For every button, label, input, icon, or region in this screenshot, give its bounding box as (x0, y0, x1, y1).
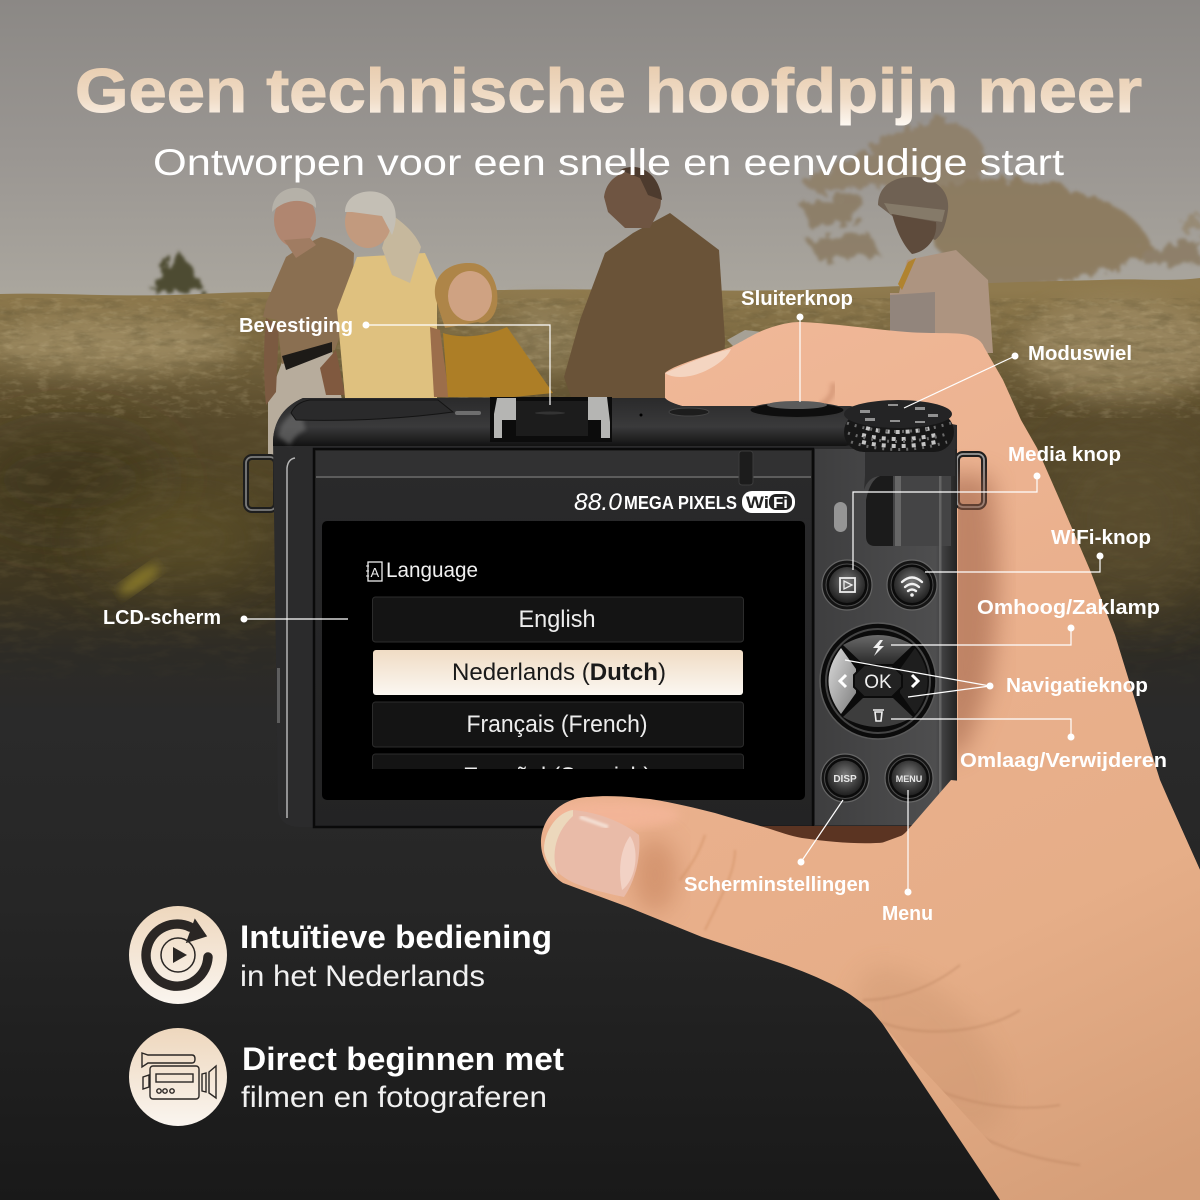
photo: small tree on the left (153, 250, 202, 292)
icon: video camera (129, 1028, 227, 1126)
up segment (843, 635, 913, 664)
camera (246, 397, 984, 827)
top pinhole (640, 414, 642, 416)
side strip (939, 476, 942, 821)
speaker slot (455, 411, 481, 415)
shadow gap under camera (750, 826, 915, 845)
camera body (273, 398, 957, 827)
skin shading (540, 801, 1080, 1165)
callout: WiFi-knop: WiFi-knop (1051, 527, 1151, 549)
option English (372, 597, 744, 642)
photo: family walking (263, 167, 993, 455)
fingernail (665, 349, 731, 377)
option Francais: Français (French) (466, 711, 648, 738)
father (564, 167, 725, 400)
navigation wheel: OK (864, 672, 892, 693)
LCD screen (322, 521, 805, 800)
mother (878, 177, 993, 353)
media button (822, 560, 872, 610)
hot shoe (490, 397, 612, 442)
panel hinge highlight (316, 476, 811, 478)
language heading: A (370, 565, 380, 580)
side port (277, 668, 280, 723)
language heading: Language (386, 559, 478, 582)
finger knuckle crease (820, 383, 833, 406)
OK button (854, 665, 902, 697)
megapixel badge: 88.0 (574, 489, 623, 516)
thumb grip (866, 476, 951, 546)
hand: palm and index finger behind camera (665, 322, 1200, 1200)
DISP button (821, 754, 869, 802)
option Nederlands selected (373, 650, 743, 695)
top left corner highlight (278, 410, 306, 445)
flash icon (873, 640, 884, 656)
option Nederlands selected: Nederlands (Dutch) (452, 659, 666, 686)
callout: Menu: Menu (882, 903, 933, 925)
option Francais (372, 702, 744, 747)
callout: Bevestiging (239, 315, 550, 405)
top plate (273, 398, 850, 446)
megapixel badge: MEGA PIXELS (624, 493, 737, 513)
right segment (900, 648, 928, 714)
navigation wheel (820, 623, 936, 739)
strap lug right (957, 454, 984, 507)
shutter button (750, 401, 844, 418)
strap lug left (246, 457, 276, 510)
callout: Sluiterknop (741, 288, 853, 402)
wifi button (887, 560, 937, 610)
callout: Moduswiel: Moduswiel (1028, 343, 1132, 365)
megapixel badge: Wi (746, 493, 769, 512)
panel tab (739, 451, 753, 485)
callout: Omlaag/Verwijderen (891, 719, 1167, 772)
megapixel badge: Fi (773, 495, 788, 512)
feature heading: Direct beginnen met (242, 1041, 564, 1077)
option English: English (518, 606, 596, 633)
megapixel badge (574, 489, 795, 516)
option Espanol clipped (372, 754, 744, 769)
palm shadow beside camera (940, 475, 998, 760)
thumb and lower palm in front of camera (540, 780, 1200, 1200)
callout: LCD-scherm: LCD-scherm (103, 607, 221, 629)
icon: replay circle (129, 906, 227, 1004)
subtitle: Ontworpen voor een snelle en eenvoudige start (153, 142, 1065, 183)
panel upper band (316, 451, 811, 477)
flip screen panel (314, 449, 813, 827)
callout: Omlaag/Verwijderen: Omlaag/Verwijderen (960, 750, 1167, 772)
DISP button: DISP (833, 774, 857, 785)
title: Geen technische hoofdpijn meer (75, 57, 1142, 126)
mode dial (844, 400, 954, 452)
trash icon (873, 710, 884, 721)
grandfather (263, 188, 354, 455)
callout: LCD-scherm (103, 607, 348, 629)
MENU button (885, 754, 933, 802)
callout: Media knop: Media knop (1008, 444, 1121, 466)
callout: Menu (882, 790, 933, 925)
callout: Bevestiging: Bevestiging (239, 315, 353, 337)
callout: Omhoog/Zaklamp (891, 597, 1160, 645)
callout: Scherminstellingen: Scherminstellingen (684, 874, 870, 896)
callout: Omhoog/Zaklamp: Omhoog/Zaklamp (977, 597, 1160, 619)
photo: field fading into dark lower area (0, 278, 1200, 1200)
grandmother (337, 191, 437, 398)
feature: intuitive operation (129, 906, 552, 1004)
thumbnail (544, 810, 639, 897)
down segment (843, 698, 913, 727)
callout: Scherminstellingen (684, 800, 870, 896)
indicator LED (834, 502, 847, 532)
shoulder under dial (815, 430, 955, 490)
feature: start filming directly (129, 1028, 564, 1126)
photo: tree on the right (800, 120, 1200, 295)
grey sleeve behind finger (727, 330, 762, 348)
callout: WiFi-knop (925, 527, 1151, 572)
top small button (669, 408, 709, 416)
callout: Moduswiel (904, 343, 1132, 408)
right control panel (815, 449, 957, 825)
MENU button: MENU (896, 774, 922, 784)
callout: Sluiterknop: Sluiterknop (741, 288, 853, 310)
left arrow (840, 675, 846, 687)
callout: Navigatieknop (845, 660, 1148, 697)
left body highlight (287, 458, 295, 818)
feature subtext: filmen en fotograferen (241, 1081, 547, 1114)
photo: grass light and shade patches (0, 298, 1200, 698)
callout: Navigatieknop: Navigatieknop (1006, 675, 1148, 697)
background sky (0, 0, 1200, 310)
child (430, 263, 553, 397)
right arrow (912, 675, 918, 687)
callout: Media knop (853, 444, 1121, 570)
feature heading: Intuïtieve bediening (240, 919, 552, 955)
feature subtext: in het Nederlands (240, 960, 485, 993)
option Espanol clipped: Español (Spanish) (463, 763, 651, 790)
top left raised panel (291, 400, 453, 420)
left segment (828, 648, 856, 714)
